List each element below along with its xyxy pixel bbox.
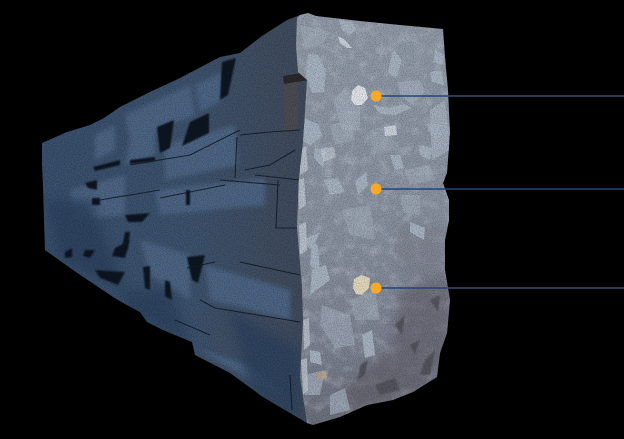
weathered lower right area: [345, 225, 450, 410]
callout line 3: [380, 287, 624, 289]
stone block: [30, 5, 455, 430]
rust coloured recess: [283, 78, 298, 132]
stone grain: [296, 13, 450, 425]
mottled stone layer: [296, 14, 450, 424]
side face of block: [42, 15, 307, 423]
stone grain: [42, 16, 307, 422]
aggregate chips: [300, 20, 450, 415]
mortar gaps and shadows: [65, 58, 236, 300]
white highlight stone near top marker: [351, 85, 368, 105]
crack lines: [100, 130, 300, 410]
callout line 1: [380, 95, 624, 97]
marker dot 1: [370, 90, 382, 102]
darker pits: [358, 295, 440, 395]
lighter stone courses: [70, 72, 290, 400]
cream highlight stone near bottom marker: [353, 275, 370, 295]
bright left edge chips: [298, 146, 310, 395]
marker dot 2: [370, 184, 382, 194]
marker dot 3: [370, 282, 382, 294]
bright chips: [321, 36, 397, 378]
darker lower shading: [45, 200, 300, 420]
front face of block: [296, 13, 450, 425]
tan chip: [316, 371, 328, 380]
callout line 2: [380, 188, 624, 190]
